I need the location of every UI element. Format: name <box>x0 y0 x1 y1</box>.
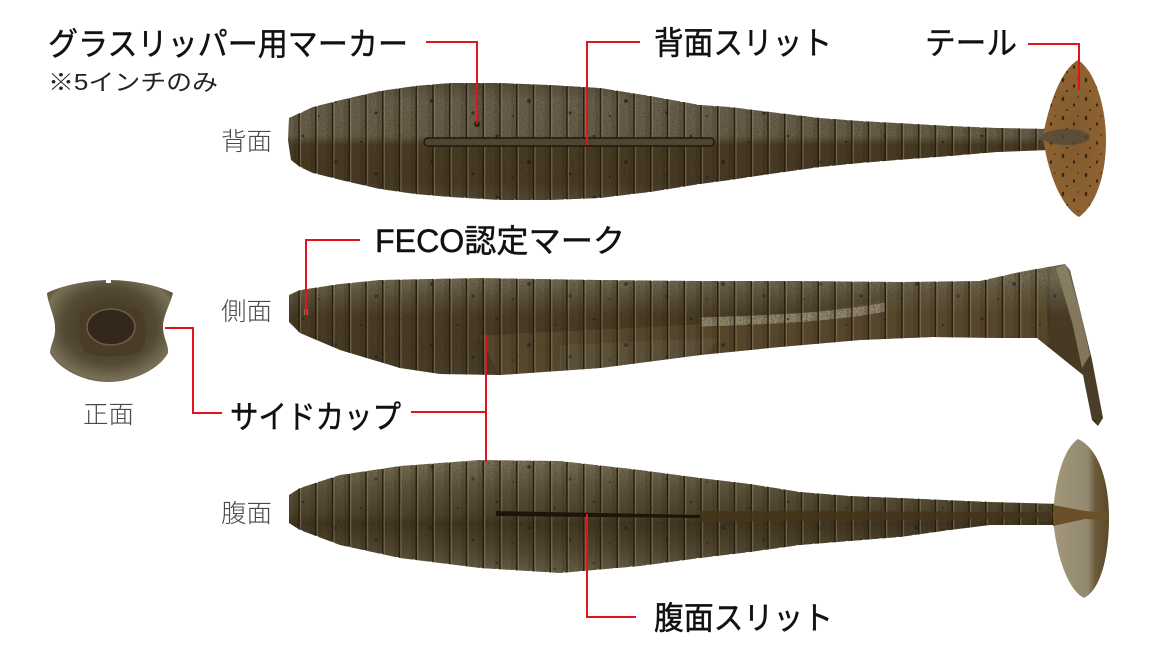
lure: side view <box>285 260 1110 430</box>
grass ripper marker <box>474 121 480 127</box>
top notch <box>106 280 111 283</box>
belly keel <box>700 511 1090 522</box>
label: grass ripper marker: グラスリッパー用マーカー <box>48 26 408 62</box>
belly body <box>289 460 1054 573</box>
front recess <box>79 306 146 356</box>
dorsal rib notches <box>300 82 997 201</box>
tail disc: dorsal <box>1042 60 1106 217</box>
label: side cup: サイドカップ <box>230 399 401 435</box>
note: 5 inch only: ※5インチのみ <box>48 69 218 95</box>
lure: dorsal view <box>285 60 1106 217</box>
view label: front: 正面 <box>83 401 134 429</box>
side rib notches <box>300 271 1020 289</box>
front cup <box>87 309 135 345</box>
lure: belly view <box>285 439 1109 598</box>
label: belly slit: 腹面スリット <box>654 600 833 636</box>
side cup shade <box>480 296 1050 375</box>
view label: back: 背面 <box>221 128 272 156</box>
label: tail: テール <box>925 25 1017 61</box>
label: FECO mark: FECO認定マーク <box>375 223 625 259</box>
belly slit <box>496 511 700 518</box>
side body <box>285 260 1110 430</box>
lure: front view <box>47 280 173 382</box>
tail fin: side <box>1056 264 1090 368</box>
dorsal slit <box>424 138 714 146</box>
FECO mark <box>304 309 308 315</box>
view label: side: 側面 <box>221 298 272 326</box>
tail disc: belly <box>1053 439 1109 598</box>
dorsal body <box>285 80 1055 205</box>
label: dorsal slit: 背面スリット <box>654 25 832 61</box>
belly rib notches <box>300 459 990 574</box>
view label: belly: 腹面 <box>221 500 272 528</box>
front body <box>47 280 173 382</box>
side cup highlight <box>700 307 885 322</box>
leader lines <box>165 42 1079 617</box>
